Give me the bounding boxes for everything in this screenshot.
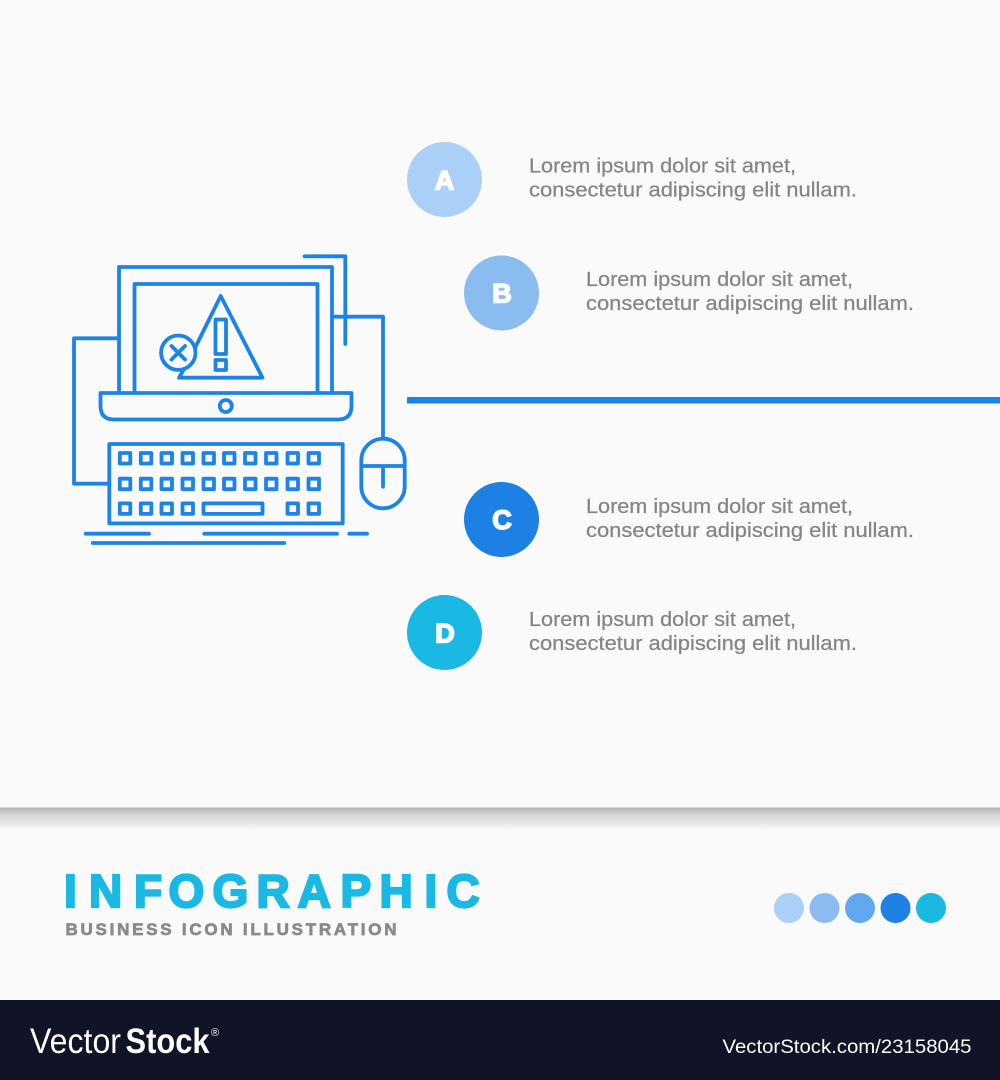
warning triangle [179,296,262,378]
watermark bar [0,1000,1000,1080]
step B [464,256,914,330]
horizontal connector bar [407,397,1000,404]
text B: consectetur adipiscing elit nullam. [586,293,914,315]
title: INFOGRAPHIC [64,865,480,917]
text D: Lorem ipsum dolor sit amet, [529,609,796,631]
text C: consectetur adipiscing elit nullam. [586,520,914,542]
badge A [407,142,482,217]
subtitle: BUSINESS ICON ILLUSTRATION [66,920,396,939]
monitor screen [134,284,318,392]
error cross [172,346,185,360]
left cable [74,338,119,484]
mouse [361,439,405,508]
watermark logo [30,1022,219,1061]
text A: consectetur adipiscing elit nullam. [529,180,857,202]
badge B [464,256,539,330]
monitor base [100,393,352,420]
step D [407,595,857,670]
watermark logo: Vector [30,1022,121,1061]
power button [220,400,232,412]
watermark logo: Stock [126,1022,210,1061]
badge C [464,482,539,557]
text B: Lorem ipsum dolor sit amet, [586,269,853,291]
step C [464,482,914,557]
text C: Lorem ipsum dolor sit amet, [586,496,853,518]
footer shadow band [0,808,1000,830]
text A: Lorem ipsum dolor sit amet, [529,156,796,178]
letter B: B [492,278,512,308]
error circle [161,336,196,370]
exclamation mark [216,320,226,370]
monitor frame [119,267,332,392]
icon: computer with error warning [74,256,405,543]
letter D: D [435,618,455,648]
right cable [332,317,383,437]
watermark id: VectorStock.com/23158045 [722,1036,972,1058]
letter A: A [435,166,454,196]
top right bracket [304,256,345,344]
watermark logo: ® [211,1027,219,1039]
ground lines [86,534,367,543]
letter C: C [492,505,512,535]
text D: consectetur adipiscing elit nullam. [529,633,857,655]
step A [407,142,857,217]
badge D [407,595,482,670]
keyboard keys [120,453,319,514]
colour dots [774,893,946,923]
keyboard body [109,444,343,523]
